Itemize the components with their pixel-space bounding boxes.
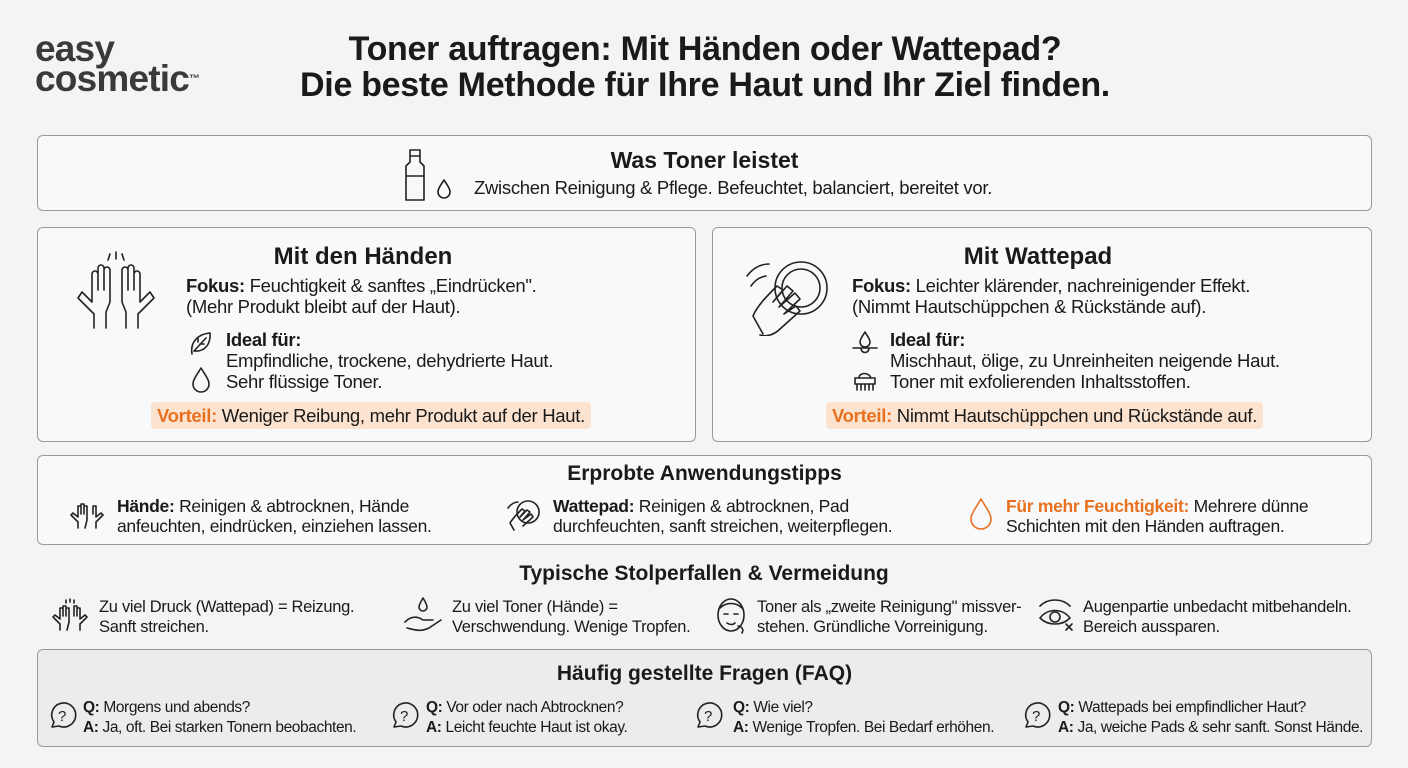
panel: Anwendungstipps (37, 455, 1372, 545)
pitfall 3 (717, 598, 1021, 636)
advantage: Vorteil: Weniger Reibung, mehr Produkt auf der Haut. (157, 405, 585, 426)
icon: orange drop (970, 498, 992, 530)
panel: FAQ (37, 649, 1372, 747)
faq 4: A: Ja, weiche Pads & sehr sanft. Sonst Hände. (1058, 719, 1363, 736)
title (300, 30, 1110, 104)
faq 4: Q: Wattepads bei empfindlicher Haut? (1058, 699, 1306, 716)
ideal text: Empfindliche, trockene, dehydrierte Haut. (226, 350, 553, 371)
ideal text: Ideal für: (890, 329, 965, 350)
icon: hands small (70, 503, 104, 529)
faq 3: Q: Wie viel? (733, 699, 813, 716)
icon: brush (854, 372, 876, 391)
pitfall 1: Sanft streichen. (99, 618, 209, 636)
title: Die beste Methode für Ihre Haut und Ihr Ziel finden. (300, 66, 1110, 104)
title: Toner auftragen: Mit Händen oder Wattepad? (349, 30, 1061, 68)
tip: moisture: Schichten mit den Händen auftragen. (1006, 516, 1284, 536)
icon: leaf (190, 332, 211, 355)
pitfall 2: Zu viel Toner (Hände) = (452, 598, 618, 616)
panel: Mit den Händen (37, 227, 696, 442)
faq 1: Q: Morgens und abends? (83, 699, 250, 716)
ideal text (890, 329, 1280, 392)
icon: drop (192, 367, 210, 393)
tip: wattepad: durchfeuchten, sanft streichen, weiterpflegen. (553, 516, 892, 536)
icon: hand with pad (746, 261, 828, 336)
ideal text (226, 329, 553, 392)
faq 2: Q: Vor oder nach Abtrocknen? (426, 699, 623, 716)
faq 3: ? (704, 708, 712, 725)
faq 1: A: Ja, oft. Bei starken Tonern beobachten. (83, 719, 356, 736)
pitfall 1: Zu viel Druck (Wattepad) = Reizung. (99, 598, 354, 616)
tip: hands (70, 496, 432, 536)
faq 1: ? (58, 708, 66, 725)
faq 2 (392, 699, 627, 736)
faq 3 (696, 699, 994, 736)
tip: hands: Hände: Reinigen & abtrocknen, Hände (117, 496, 409, 516)
tip: moisture (970, 496, 1308, 536)
icon: pad small (507, 500, 540, 531)
focus text: Fokus: Leichter klärender, nachreinigender Effekt. (852, 275, 1250, 296)
logo: cosmetic™ (35, 58, 199, 99)
pitfall 4 (1039, 598, 1351, 636)
tip: wattepad (507, 496, 892, 536)
pitfall 4: Augenpartie unbedacht mitbehandeln. (1083, 598, 1351, 616)
pitfall 4: Bereich aussparen. (1083, 618, 1220, 636)
ideal text: Mischhaut, ölige, zu Unreinheiten neigende Haut. (890, 350, 1280, 371)
pitfall 2: Verschwendung. Wenige Tropfen. (452, 618, 690, 636)
heading: Was Toner leistet (611, 147, 798, 173)
focus text (852, 275, 1250, 317)
icon: drop pore (852, 331, 878, 354)
logo (35, 28, 199, 99)
focus text: (Mehr Produkt bleibt auf der Haut). (186, 296, 460, 317)
focus text: (Nimmt Hautschüppchen & Rückstände auf). (852, 296, 1206, 317)
heading: Häufig gestellte Fragen (FAQ) (557, 662, 852, 685)
panel: Was Toner leistet (37, 135, 1372, 211)
icon: bottle and drop (405, 149, 451, 201)
heading: Stolperfallen: Typische Stolperfallen & Vermeidung (519, 562, 889, 585)
heading: Mit den Händen (274, 243, 452, 270)
icon: hands (77, 251, 155, 329)
pitfall 3: stehen. Gründliche Vorreinigung. (757, 618, 988, 636)
panel: Mit Wattepad (712, 227, 1372, 442)
tip: moisture: Für mehr Feuchtigkeit: Mehrere dünne (1006, 496, 1308, 516)
tip: hands: anfeuchten, eindrücken, einziehen lassen. (117, 516, 432, 536)
pitfalls row (52, 597, 1351, 636)
heading: Erprobte Anwendungstipps (567, 462, 842, 485)
ideal text: Toner mit exfolierenden Inhaltsstoffen. (890, 371, 1191, 392)
logo: easy (35, 28, 114, 69)
ideal text: Sehr flüssige Toner. (226, 371, 382, 392)
pitfall 3: Toner als „zweite Reinigung" missver- (757, 598, 1021, 616)
ideal text: Ideal für: (226, 329, 301, 350)
focus text (186, 275, 536, 317)
text: Zwischen Reinigung & Pflege. Befeuchtet, balanciert, bereitet vor. (474, 177, 992, 198)
pitfall 2 (404, 597, 690, 636)
faq 2: ? (400, 708, 408, 725)
pitfall 1 (52, 598, 354, 636)
faq 4: ? (1032, 708, 1040, 725)
advantage: Vorteil: Nimmt Hautschüppchen und Rückstände auf. (832, 405, 1257, 426)
tip: wattepad: Wattepad: Reinigen & abtrocknen, Pad (553, 496, 849, 516)
focus text: Fokus: Feuchtigkeit & sanftes „Eindrücken". (186, 275, 536, 296)
faq 1 (50, 699, 356, 736)
faq 2: A: Leicht feuchte Haut ist okay. (426, 719, 627, 736)
faq 4 (1024, 699, 1363, 736)
heading: Mit Wattepad (964, 243, 1112, 270)
faq 3: A: Wenige Tropfen. Bei Bedarf erhöhen. (733, 719, 994, 736)
